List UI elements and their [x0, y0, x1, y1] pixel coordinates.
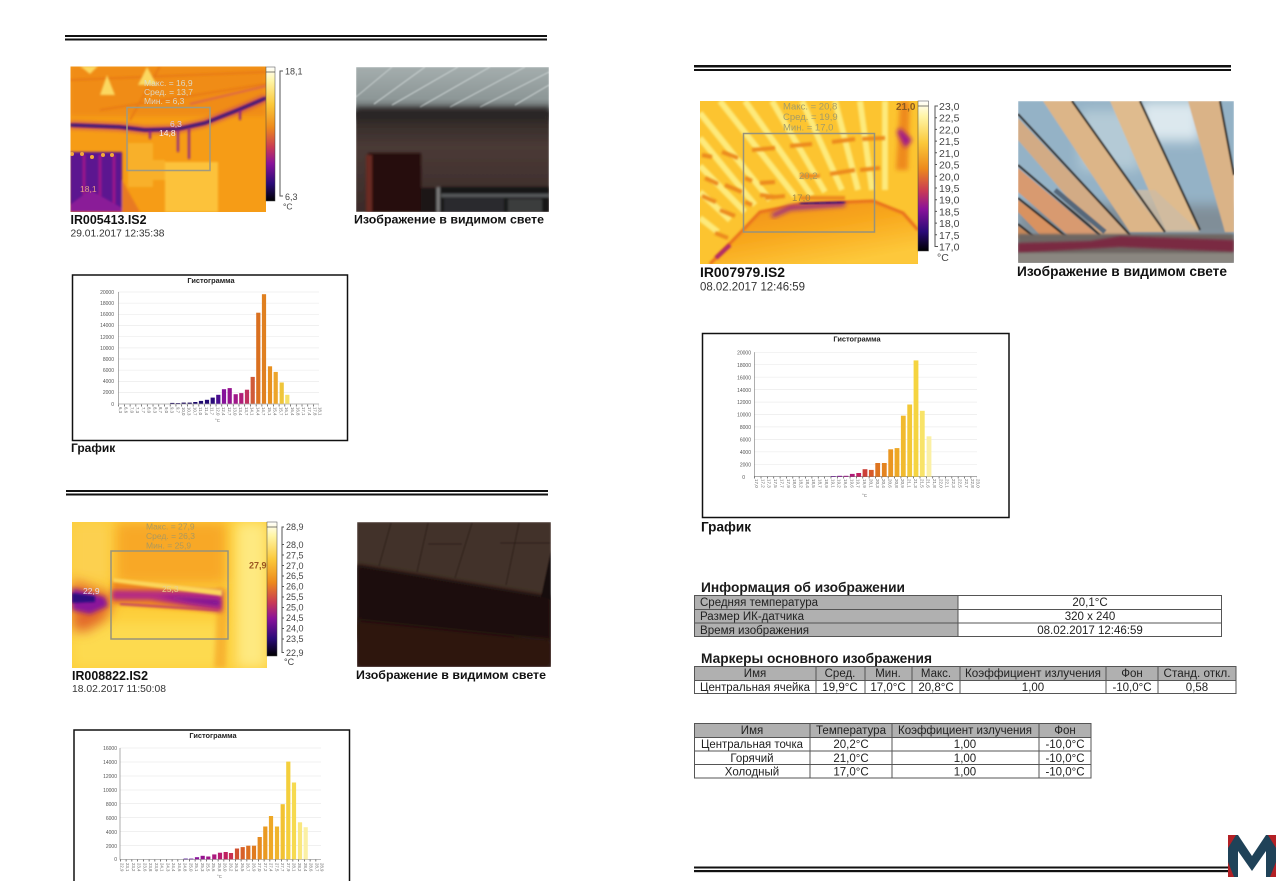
- colour scale: IR007979: 19,5: [939, 183, 960, 195]
- table: main image markers: 20,8°C: [918, 682, 954, 694]
- x axis labels: 27,2: [263, 863, 268, 872]
- file name and date: IR005413: 29.01.2017 12:35:38: [70, 228, 165, 240]
- table: main image markers: Сред.: [825, 668, 855, 680]
- file name and date: IR007979: [700, 264, 805, 294]
- x axis labels: 20,3: [875, 479, 880, 488]
- colour scale: IR008822: 24,5: [286, 613, 304, 623]
- colour scale: IR005413: 6,3: [285, 192, 298, 202]
- colour scale: IR008822: 25,0: [286, 602, 304, 612]
- colour scale: IR008822: 23,5: [286, 634, 304, 644]
- x axis labels: 20,9: [900, 479, 905, 488]
- colour scale: IR007979: 20,0: [939, 171, 960, 183]
- x axis labels: 10,3: [187, 407, 192, 416]
- histogram panel: IR008822: 8000: [106, 802, 117, 808]
- x axis labels: 20,1: [868, 479, 873, 488]
- table: spot markers: -10,0°C: [1045, 766, 1085, 778]
- x axis labels: 13,7: [244, 407, 249, 416]
- x axis labels: °C: [862, 493, 868, 498]
- caption: visible light IR005413: Изображение в видимом свете: [354, 212, 544, 226]
- x axis labels: 11,0: [198, 407, 203, 416]
- colour scale: IR008822: 22,9: [286, 648, 304, 658]
- colour scale: IR008822: 27,0: [286, 561, 304, 571]
- x axis labels: 23,4: [137, 863, 142, 872]
- x axis labels: [120, 863, 324, 879]
- histogram panel: IR005413: 18000: [100, 301, 114, 307]
- visible light photo: roof rafters and foil insulation: [1018, 101, 1234, 263]
- x axis labels: 22,3: [951, 479, 956, 488]
- histogram panel: IR007979: 2000: [740, 462, 751, 468]
- x axis labels: 25,0: [188, 863, 193, 872]
- x axis labels: 26,5: [240, 863, 245, 872]
- x axis labels: 28,4: [303, 863, 308, 872]
- histogram panel: IR005413: 0: [111, 402, 114, 408]
- x axis labels: 20,4: [881, 479, 886, 488]
- measurement box and overlay values: IR008822: 22,9: [83, 586, 100, 596]
- histogram panel: IR005413: 10000: [100, 346, 114, 352]
- header rule: page 1 middle: [66, 490, 548, 496]
- x axis labels: 24,8: [183, 863, 188, 872]
- colour scale: IR005413: [266, 66, 303, 212]
- x axis labels: 17,0: [754, 479, 759, 488]
- x axis labels: 7,3: [135, 407, 140, 414]
- colour scale: IR007979: 18,0: [939, 218, 960, 230]
- x axis labels: 22,7: [964, 479, 969, 488]
- table: spot markers: 1,00: [954, 753, 976, 765]
- x axis labels: 25,1: [194, 863, 199, 872]
- x axis labels: 6,3: [118, 407, 123, 414]
- x axis labels: 18,4: [805, 479, 810, 488]
- thermal image: IR007979: [700, 101, 918, 264]
- x axis labels: 24,6: [177, 863, 182, 872]
- measurement box and overlay values: IR007979: [744, 102, 916, 232]
- histogram panel: IR008822: 12000: [103, 774, 117, 780]
- x axis labels: 26,2: [228, 863, 233, 872]
- colour scale: IR007979: 21,5: [939, 136, 960, 148]
- histogram panel: IR007979: 0: [742, 475, 745, 481]
- x axis labels: 17,8: [313, 407, 318, 416]
- table: image information: Время изображения: [700, 625, 809, 637]
- thermal image: IR008822: [72, 522, 267, 668]
- x axis labels: [118, 407, 322, 423]
- colour scale: IR007979: 19,0: [939, 195, 960, 207]
- x axis labels: 23,9: [154, 863, 159, 872]
- colour scale: IR008822: [267, 522, 304, 667]
- x axis labels: 28,9: [320, 863, 324, 872]
- table: spot markers: [694, 724, 1091, 778]
- x axis labels: 21,1: [907, 479, 912, 488]
- file name and date: IR007979: 08.02.2017 12:46:59: [700, 282, 805, 294]
- table: spot markers: -10,0°C: [1045, 753, 1085, 765]
- measurement box and overlay values: IR008822: Мин. = 25,9: [146, 540, 191, 550]
- table: spot markers: Коэффициент излучения: [898, 725, 1032, 737]
- x axis labels: 27,5: [274, 863, 279, 872]
- colour scale: IR007979: 17,5: [939, 230, 960, 242]
- table: main image markers: Центральная ячейка: [700, 682, 811, 694]
- x axis labels: 19,7: [856, 479, 861, 488]
- table: main image markers: Мин.: [875, 668, 901, 680]
- x axis labels: 7,0: [130, 407, 134, 414]
- x axis labels: 25,5: [206, 863, 210, 872]
- measurement box and overlay values: IR007979: Макс. = 20,8: [783, 102, 837, 112]
- x axis labels: 24,4: [171, 863, 176, 872]
- histogram panel: IR008822: 0: [114, 857, 117, 863]
- histogram panel: IR008822: 2000: [106, 844, 117, 850]
- x axis labels: 21,3: [913, 479, 918, 488]
- x axis labels: 19,1: [830, 479, 835, 488]
- x axis labels: 26,9: [251, 863, 256, 872]
- x axis labels: 18,7: [818, 479, 823, 488]
- x axis labels: 14,7: [261, 407, 266, 416]
- table: spot markers: Фон: [1054, 725, 1076, 737]
- table: main image markers: [694, 666, 1236, 694]
- measurement box and overlay values: IR005413: [80, 78, 210, 194]
- x axis labels: 16,4: [290, 407, 295, 416]
- colour scale: IR008822: 27,5: [286, 550, 304, 560]
- table: main image markers: 1,00: [1022, 682, 1044, 694]
- x axis labels: 19,6: [849, 479, 854, 488]
- header rule: page 2 bottom: [694, 866, 1229, 872]
- x axis labels: 25,3: [200, 863, 205, 872]
- x axis labels: 20,8: [894, 479, 899, 488]
- histogram panel: IR005413: 6000: [103, 368, 114, 374]
- measurement box and overlay values: IR005413: Мин. = 6,3: [144, 96, 185, 106]
- x axis labels: 13,4: [238, 407, 243, 416]
- bars: [184, 762, 308, 859]
- x axis labels: 18,1: [318, 407, 322, 416]
- measurement box and overlay values: IR008822: 25,3: [162, 584, 179, 594]
- measurement box and overlay values: IR007979: 17,0: [792, 193, 810, 204]
- x axis labels: 18,5: [811, 479, 816, 488]
- table: spot markers: 1,00: [954, 766, 976, 778]
- table: spot markers: -10,0°C: [1045, 739, 1085, 751]
- x axis labels: 21,5: [919, 479, 924, 488]
- histogram panel: IR007979: [702, 334, 1009, 518]
- x axis labels: 28,1: [292, 863, 296, 872]
- measurement box and overlay values: IR008822: Сред. = 26,3: [146, 531, 195, 541]
- table: spot markers: 1,00: [954, 739, 976, 751]
- table: main image markers: 0,58: [1186, 682, 1208, 694]
- table: main image markers: Коэффициент излучения: [965, 668, 1101, 680]
- x axis labels: 22,9: [120, 863, 124, 872]
- heading: main image markers: Маркеры основного изображения: [701, 650, 932, 666]
- histogram panel: IR008822: 14000: [103, 760, 117, 766]
- table: image information: 08.02.2017 12:46:59: [1037, 625, 1143, 637]
- x axis labels: 10,0: [181, 407, 186, 416]
- x axis labels: 11,7: [210, 407, 215, 416]
- table: image information: 20,1°C: [1072, 597, 1108, 609]
- colour scale: IR007979: 22,5: [939, 113, 960, 125]
- table: image information: Размер ИК-датчика: [700, 611, 805, 623]
- x axis labels: 14,4: [255, 407, 260, 416]
- measurement box and overlay values: IR007979: 20,2: [799, 171, 818, 182]
- x axis labels: 18,9: [824, 479, 829, 488]
- x axis labels: 24,3: [165, 863, 170, 872]
- x axis labels: 23,8: [148, 863, 153, 872]
- x axis labels: 24,1: [160, 863, 165, 872]
- table: main image markers: Макс.: [921, 668, 951, 680]
- table: spot markers: Имя: [741, 725, 763, 737]
- x axis labels: 17,4: [307, 407, 312, 416]
- x axis labels: 27,4: [269, 863, 274, 872]
- histogram panel: IR005413: Гистограмма: [187, 276, 236, 285]
- x axis labels: 14,1: [250, 407, 255, 416]
- measurement box and overlay values: IR005413: 6,3: [170, 119, 182, 129]
- measurement box and overlay values: IR008822: [83, 522, 267, 639]
- histogram panel: IR008822: [74, 730, 350, 881]
- x axis labels: 17,3: [767, 479, 772, 488]
- x axis labels: 17,7: [779, 479, 784, 488]
- x axis labels: 18,2: [798, 479, 804, 488]
- x axis labels: 22,0: [938, 479, 943, 488]
- table: main image markers: 19,9°C: [822, 682, 858, 694]
- x axis labels: 15,4: [273, 407, 278, 416]
- histogram panel: IR005413: [72, 275, 348, 440]
- colour scale: IR008822: 25,5: [286, 592, 304, 602]
- table: main image markers: Фон: [1121, 668, 1143, 680]
- x axis labels: 17,1: [301, 407, 306, 416]
- measurement box and overlay values: IR005413: Сред. = 13,7: [144, 87, 193, 97]
- file name and date: IR005413: IR005413.IS2: [70, 213, 147, 227]
- x axis labels: 28,7: [314, 863, 319, 872]
- x axis labels: 23,1: [125, 863, 130, 872]
- x axis labels: °C: [215, 418, 220, 423]
- x axis labels: 9,0: [164, 407, 169, 414]
- x axis labels: 19,4: [843, 479, 848, 488]
- x axis labels: 26,7: [246, 863, 251, 872]
- visible light photo: dark floor and wall: [357, 522, 551, 667]
- x axis labels: 16,8: [296, 407, 300, 416]
- table: main image markers: 17,0°C: [870, 682, 906, 694]
- x axis labels: 26,3: [234, 863, 239, 872]
- table: spot markers: Горячий: [730, 753, 774, 765]
- table: main image markers: -10,0°C: [1112, 682, 1152, 694]
- x axis labels: 17,2: [760, 479, 765, 488]
- histogram panel: IR008822: 4000: [106, 830, 117, 836]
- histogram panel: IR007979: 14000: [737, 388, 751, 394]
- table: spot markers: Холодный: [725, 766, 779, 778]
- x axis labels: 17,9: [786, 479, 791, 488]
- measurement box and overlay values: IR007979: 21,0: [896, 102, 916, 113]
- x axis labels: 27,7: [280, 863, 285, 872]
- header rule: page 1 top: [65, 35, 547, 40]
- x axis labels: 22,8: [970, 479, 975, 488]
- table: main image markers: Станд. откл.: [1164, 668, 1230, 680]
- x axis labels: 23,2: [131, 863, 136, 872]
- x axis labels: 27,9: [286, 863, 291, 872]
- x axis labels: 23,0: [976, 479, 980, 488]
- file name and date: IR008822: 18.02.2017 11:50:08: [72, 683, 166, 695]
- x axis labels: 27,0: [257, 863, 262, 872]
- measurement box and overlay values: IR008822: Макс. = 27,9: [146, 522, 195, 532]
- x axis labels: 7,7: [141, 407, 146, 414]
- histogram panel: IR007979: 20000: [737, 350, 751, 356]
- file name and date: IR005413: [70, 213, 165, 240]
- colour scale: IR007979: [918, 101, 960, 264]
- histogram panel: IR007979: 10000: [737, 412, 751, 418]
- x axis labels: 6,6: [124, 407, 129, 414]
- colour scale: IR008822: 26,0: [286, 582, 304, 592]
- measurement box and overlay values: IR008822: 27,9: [249, 560, 267, 570]
- colour scale: IR005413: 18,1: [285, 66, 303, 76]
- table: image information: [694, 596, 1222, 637]
- heading: image information: Информация об изображении: [701, 579, 905, 595]
- caption: visible light IR008822: Изображение в видимом свете: [356, 668, 546, 682]
- caption: visible light IR007979: Изображение в видимом свете: [1017, 264, 1227, 279]
- x axis labels: 12,0: [215, 407, 220, 416]
- x axis labels: [754, 479, 980, 498]
- logo: M mark: [1228, 835, 1276, 877]
- x axis labels: 22,5: [957, 479, 962, 488]
- colour scale: IR007979: 18,5: [939, 206, 960, 218]
- x axis labels: 17,5: [773, 479, 778, 488]
- x axis labels: 20,6: [888, 479, 892, 488]
- histogram panel: IR007979: 12000: [737, 400, 751, 406]
- x axis labels: 10,7: [192, 407, 197, 416]
- colour scale: IR008822: 28,9: [286, 522, 304, 532]
- x axis labels: 11,4: [204, 407, 209, 416]
- table: image information: 320 x 240: [1065, 611, 1115, 623]
- x axis labels: 8,3: [152, 407, 157, 414]
- x axis labels: 15,1: [267, 407, 272, 416]
- histogram panel: IR005413: 12000: [100, 335, 114, 341]
- colour scale: IR008822: °C: [284, 657, 295, 667]
- table: spot markers: 21,0°C: [833, 753, 869, 765]
- histogram panel: IR005413: 20000: [100, 290, 114, 296]
- measurement box and overlay values: IR005413: 18,1: [80, 184, 97, 194]
- bars: [831, 360, 931, 477]
- measurement box and overlay values: IR005413: Макс. = 16,9: [144, 78, 193, 88]
- visible light photo: room ceiling: [356, 67, 549, 212]
- histogram panel: IR005413: 2000: [103, 390, 114, 396]
- x axis labels: 19,2: [837, 479, 842, 488]
- colour scale: IR005413: °C: [283, 202, 293, 212]
- table: spot markers: 20,2°C: [833, 739, 869, 751]
- colour scale: IR008822: 24,0: [286, 624, 304, 634]
- x axis labels: 22,1: [945, 479, 950, 488]
- colour scale: IR007979: 21,0: [939, 148, 960, 160]
- bars: [170, 294, 289, 404]
- colour scale: IR007979: °C: [937, 252, 949, 264]
- x axis labels: 16,1: [284, 407, 289, 416]
- x axis labels: 25,8: [217, 863, 222, 872]
- histogram panel: IR007979: 16000: [737, 376, 751, 382]
- x axis labels: 28,6: [309, 863, 314, 872]
- histogram panel: IR008822: 16000: [103, 746, 117, 752]
- x axis labels: 8,0: [147, 407, 152, 414]
- x axis labels: 21,8: [932, 479, 937, 488]
- colour scale: IR008822: 26,5: [286, 571, 304, 581]
- colour scale: IR007979: 22,0: [939, 124, 960, 136]
- histogram panel: IR007979: Гистограмма: [833, 334, 882, 344]
- x axis labels: 23,6: [142, 863, 147, 872]
- table: image information: Средняя температура: [700, 597, 819, 609]
- x axis labels: 15,7: [278, 407, 283, 416]
- histogram panel: IR007979: 8000: [740, 425, 751, 431]
- measurement box and overlay values: IR007979: Сред. = 19,9: [783, 112, 838, 123]
- histogram panel: IR008822: 6000: [106, 816, 117, 822]
- x axis labels: 9,3: [170, 407, 174, 414]
- table: spot markers: Центральная точка: [701, 739, 804, 751]
- colour scale: IR007979: 17,0: [939, 242, 960, 254]
- file name and date: IR007979: IR007979.IS2: [700, 264, 785, 280]
- histogram panel: IR005413: 14000: [100, 323, 114, 329]
- x axis labels: 25,6: [211, 863, 216, 872]
- x axis labels: 18,0: [792, 479, 797, 488]
- histogram panel: IR008822: Гистограмма: [189, 731, 238, 740]
- header rule: page 2 top: [694, 65, 1231, 71]
- table: spot markers: Температура: [816, 725, 887, 737]
- histogram panel: IR005413: 16000: [100, 312, 114, 318]
- colour scale: IR008822: 28,0: [286, 540, 304, 550]
- thermal image: IR005413: [70, 66, 266, 212]
- x axis labels: 12,7: [227, 407, 232, 416]
- histogram panel: IR007979: 18000: [737, 363, 751, 369]
- caption: chart IR005413: График: [71, 441, 116, 455]
- x axis labels: 9,7: [175, 407, 180, 414]
- x axis labels: 26,0: [223, 863, 228, 872]
- table: main image markers: Имя: [744, 668, 766, 680]
- histogram panel: IR007979: 4000: [740, 450, 751, 456]
- colour scale: IR007979: 20,5: [939, 160, 960, 172]
- x axis labels: 13,0: [232, 407, 238, 416]
- x axis labels: 19,9: [862, 479, 867, 488]
- caption: chart IR007979: График: [701, 518, 752, 534]
- x axis labels: °C: [217, 874, 222, 879]
- table: spot markers: 17,0°C: [833, 766, 869, 778]
- x axis labels: 21,6: [926, 479, 931, 488]
- histogram panel: IR005413: 8000: [103, 357, 114, 363]
- x axis labels: 12,4: [221, 407, 226, 416]
- histogram panel: IR005413: 4000: [103, 379, 114, 385]
- measurement box and overlay values: IR005413: 14,8: [159, 128, 176, 138]
- colour scale: IR007979: 23,0: [939, 101, 960, 113]
- x axis labels: 28,2: [297, 863, 302, 872]
- histogram panel: IR008822: 10000: [103, 788, 117, 794]
- file name and date: IR008822: IR008822.IS2: [72, 669, 148, 683]
- histogram panel: IR007979: 6000: [740, 438, 751, 444]
- x axis labels: 8,7: [158, 407, 163, 414]
- measurement box and overlay values: IR007979: Мин. = 17,0: [783, 122, 833, 134]
- file name and date: IR008822: [72, 669, 166, 695]
